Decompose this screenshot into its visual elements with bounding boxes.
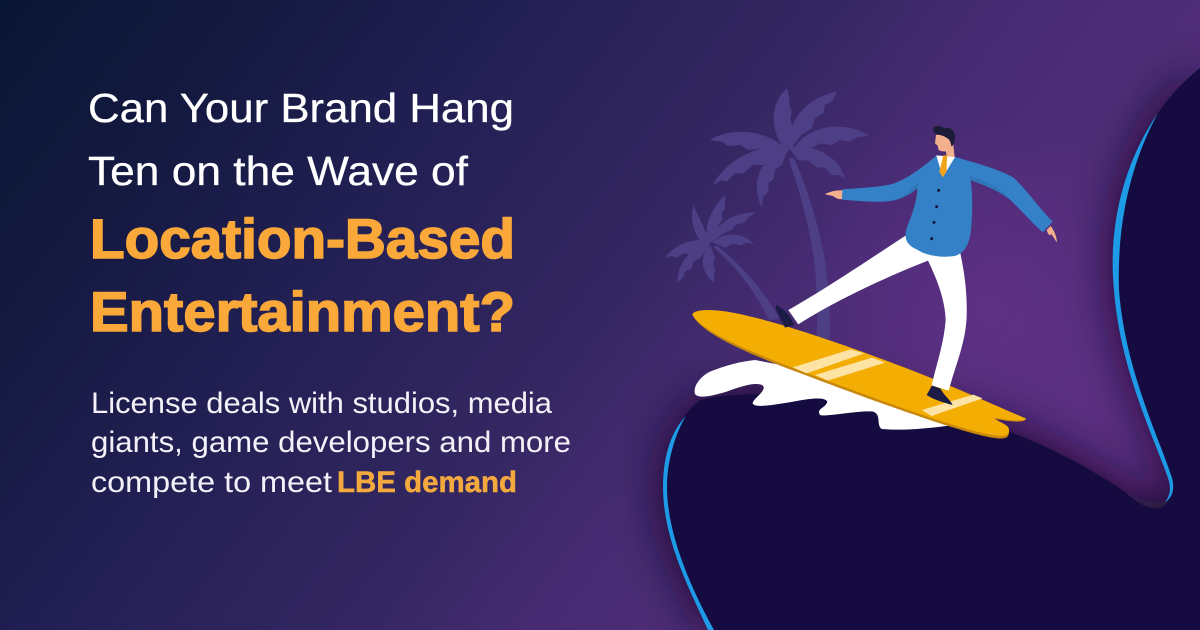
- illustration: surfer scene: [664, 88, 1057, 438]
- heading: white lines: Ten on the Wave of: [88, 148, 469, 194]
- neck and face: [935, 133, 955, 158]
- dark wave: [663, 68, 1200, 630]
- jacket shading: [894, 176, 1009, 200]
- hair: [933, 126, 955, 147]
- right hand: [1047, 226, 1057, 242]
- heading: orange lines: Entertainment?: [90, 280, 515, 343]
- title: [88, 85, 515, 343]
- icon: large palm tree: [710, 88, 869, 338]
- white collar: [936, 155, 955, 177]
- surfer figure: [776, 126, 1057, 405]
- subtitle text block: compete to meet: [91, 466, 333, 499]
- blue line: right wave edge: [1113, 113, 1173, 502]
- subtitle text block: [91, 387, 571, 499]
- subtitle text block: giants, game developers and more: [91, 426, 571, 459]
- subtitle text block: LBE demand: [337, 466, 517, 499]
- front shoe: [927, 385, 953, 405]
- heading: orange lines: Location-Based: [90, 207, 515, 270]
- blue line: left wave edge: [663, 416, 714, 630]
- subtitle text block: License deals with studios, media: [91, 387, 552, 420]
- icon: small palm tree: [664, 195, 779, 321]
- surfboard: [692, 310, 1026, 438]
- wave shadow: [663, 68, 1200, 630]
- heading: white lines: [88, 85, 514, 194]
- back shoe: [776, 305, 794, 328]
- heading: orange lines: [90, 207, 515, 343]
- heading: white lines: Can Your Brand Hang: [88, 85, 514, 131]
- white trousers: [788, 235, 967, 391]
- board stripes: [793, 349, 983, 416]
- left hand: [825, 190, 843, 199]
- jacket buttons: [930, 189, 940, 240]
- blue jacket: [842, 155, 1053, 257]
- background glow: [760, 100, 1200, 520]
- orange tie: [939, 155, 947, 177]
- icon: white foam: [695, 360, 953, 430]
